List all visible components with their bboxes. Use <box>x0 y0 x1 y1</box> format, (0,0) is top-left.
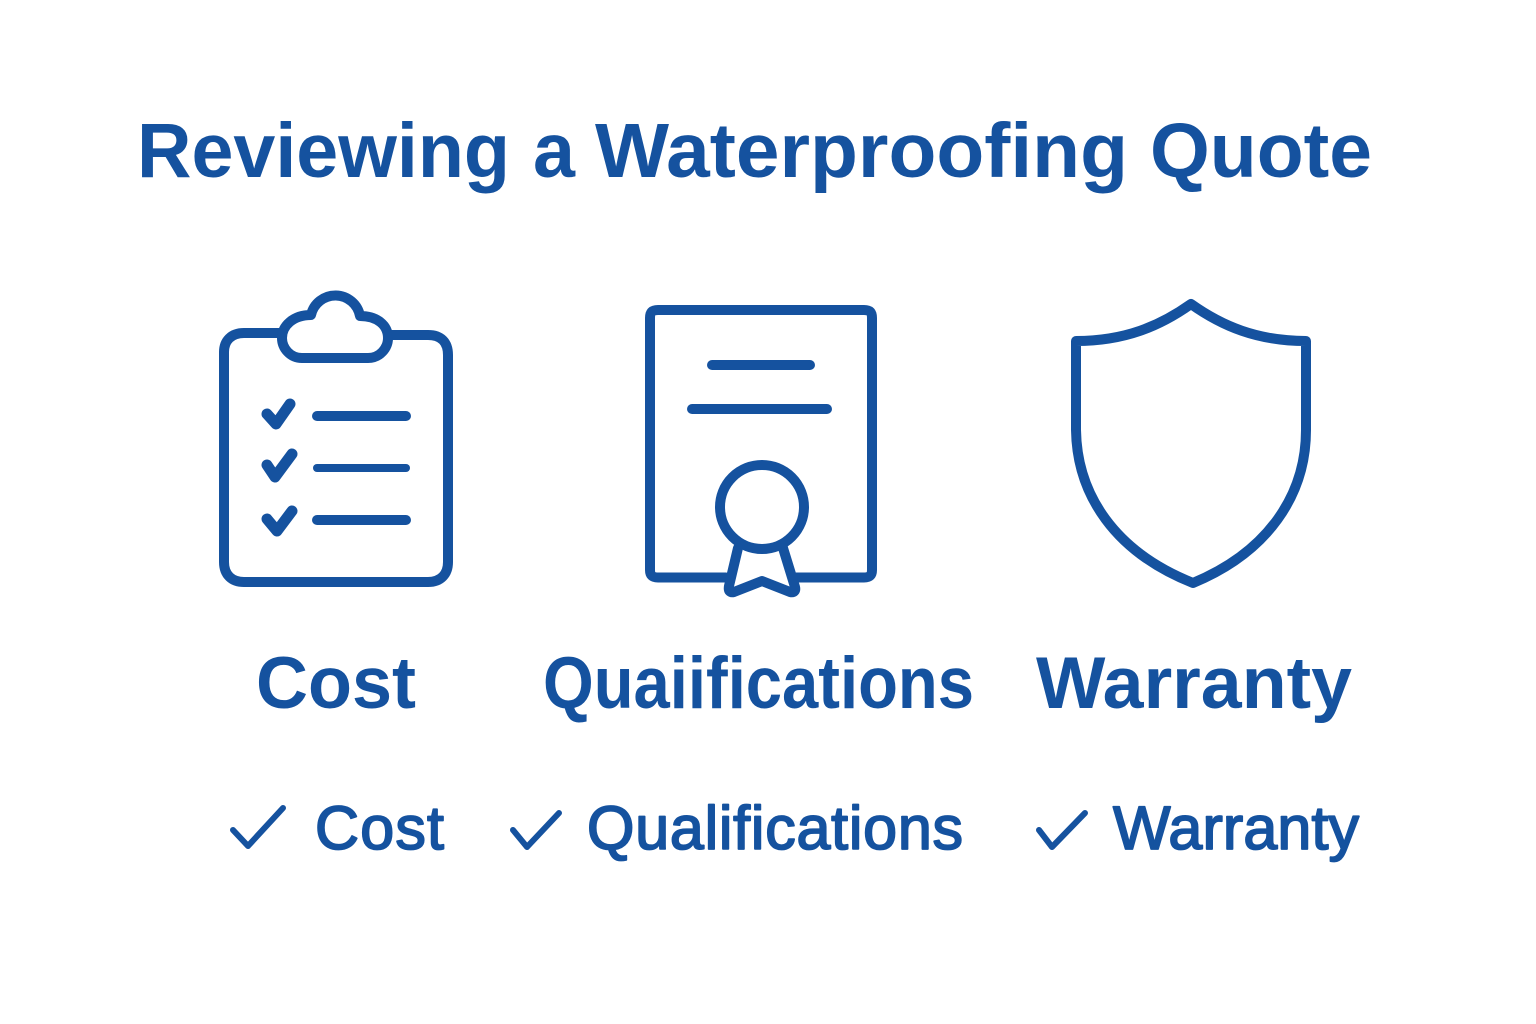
label: qualifications: Qualifications <box>587 794 963 862</box>
heading: qualifications: Quaiifications <box>543 643 974 724</box>
title: Quote <box>1150 108 1372 194</box>
checklist item: qualifications <box>513 794 963 862</box>
icon: certificate with ribbon seal <box>650 310 872 592</box>
icon: clipboard checklist <box>224 295 448 582</box>
icon: shield <box>1076 304 1306 583</box>
title <box>137 108 1372 194</box>
label: warranty: Warranty <box>1113 794 1360 862</box>
check mark: qualifications <box>513 813 559 847</box>
heading: warranty: Warranty <box>1036 643 1352 724</box>
title: a <box>533 108 576 194</box>
label: cost: Cost <box>315 794 444 862</box>
check mark: cost <box>233 808 283 846</box>
title: Waterproofing <box>595 108 1128 194</box>
title: Reviewing <box>137 108 510 194</box>
checklist item: cost <box>233 794 444 862</box>
checklist item: warranty <box>1039 794 1360 862</box>
heading: cost: Cost <box>256 643 416 724</box>
check mark: warranty <box>1039 813 1085 847</box>
